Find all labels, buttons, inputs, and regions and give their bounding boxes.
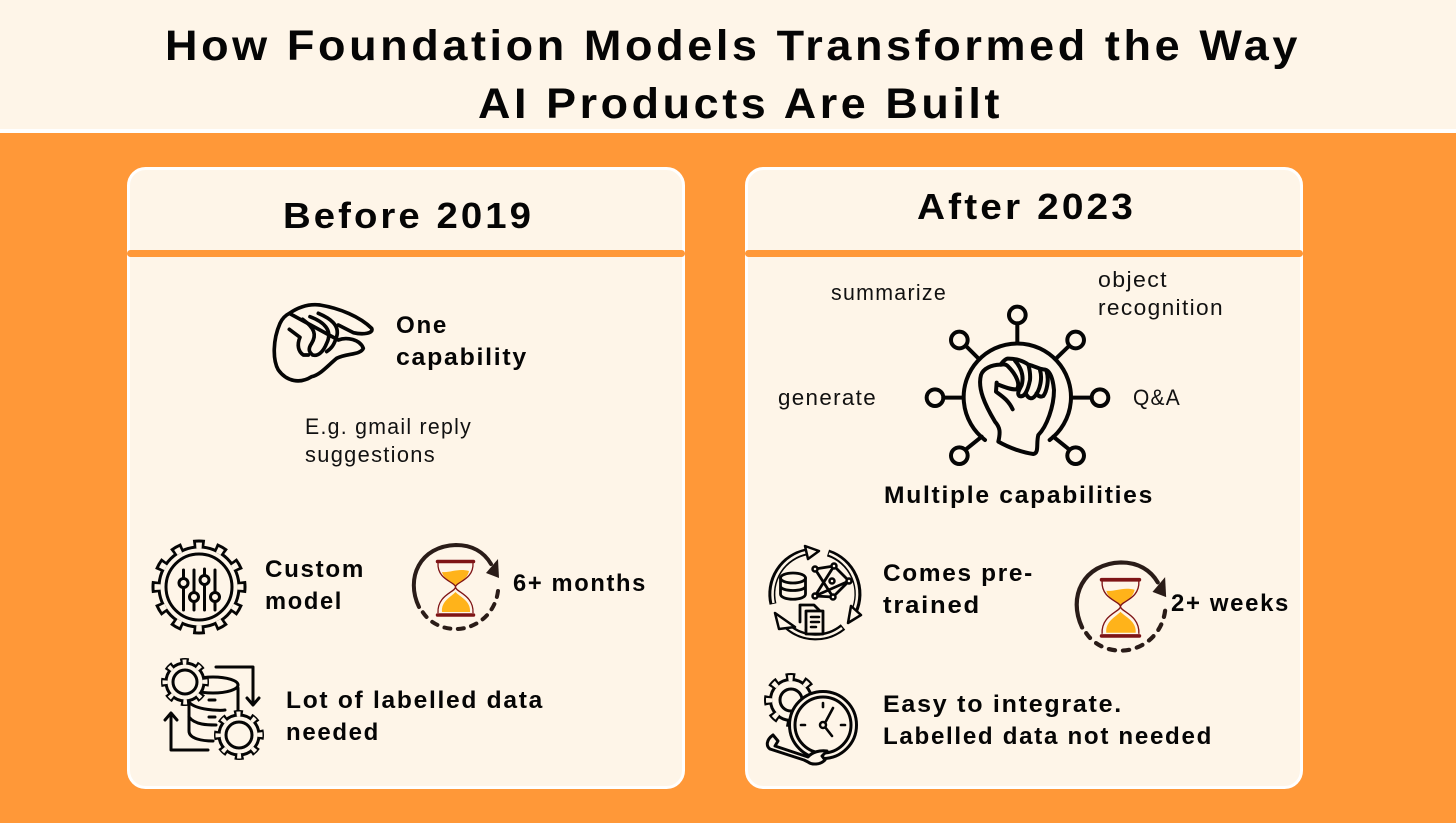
capability labels: Q&A [1133,385,1181,410]
divider: before header [127,250,685,257]
icon: database with gears [164,661,261,757]
panel: after 2023 [745,168,1303,788]
title: How Foundation Models Transformed the Way [165,22,1301,70]
title [165,22,1301,128]
label: one capability: capability [396,344,528,371]
label: lot of labelled data needed [286,687,544,746]
label: 2+ weeks: 2+ weeks [1171,590,1290,617]
icon: gear with sliders [156,544,242,630]
capability labels: summarize [831,280,947,305]
label: easy to integrate [883,691,1213,750]
label: lot of labelled data needed: Lot of labelled data [286,687,544,714]
example text: suggestions [305,442,436,467]
panel: before 2019 [127,168,685,788]
capability labels: recognition [1098,295,1224,320]
label: lot of labelled data needed: needed [286,719,380,746]
label: 6+ months: 6+ months [513,570,647,597]
label: one capability: One [396,312,448,339]
label: easy to integrate: Easy to integrate. [883,691,1123,718]
icon: clock with gear and wrench [767,677,856,764]
icon: fist with capability nodes [927,307,1108,464]
label: multiple capabilities: Multiple capabilities [884,482,1154,509]
capability labels [778,267,1224,410]
icon: hourglass with timer [414,545,499,629]
label: one capability [396,312,528,371]
label: comes pre-trained: Comes pre- [883,560,1034,587]
label: comes pre-trained [883,560,1034,619]
example text [305,414,472,467]
label: easy to integrate: Labelled data not needed [883,723,1213,750]
icon: pre-trained cycle [772,546,861,637]
label: comes pre-trained: trained [883,592,981,619]
title banner [0,0,1456,133]
icon: pinching hand [274,305,372,381]
label: custom model [265,556,365,615]
label: custom model: Custom [265,556,365,583]
heading: before 2019: Before 2019 [283,195,534,236]
title: AI Products Are Built [478,80,1003,128]
capability labels: object [1098,267,1168,292]
heading: after 2023: After 2023 [917,186,1136,227]
capability labels: generate [778,385,877,410]
example text: E.g. gmail reply [305,414,472,439]
divider: after header [745,250,1303,257]
icon: hourglass with timer [1077,562,1166,651]
label: custom model: model [265,588,343,615]
